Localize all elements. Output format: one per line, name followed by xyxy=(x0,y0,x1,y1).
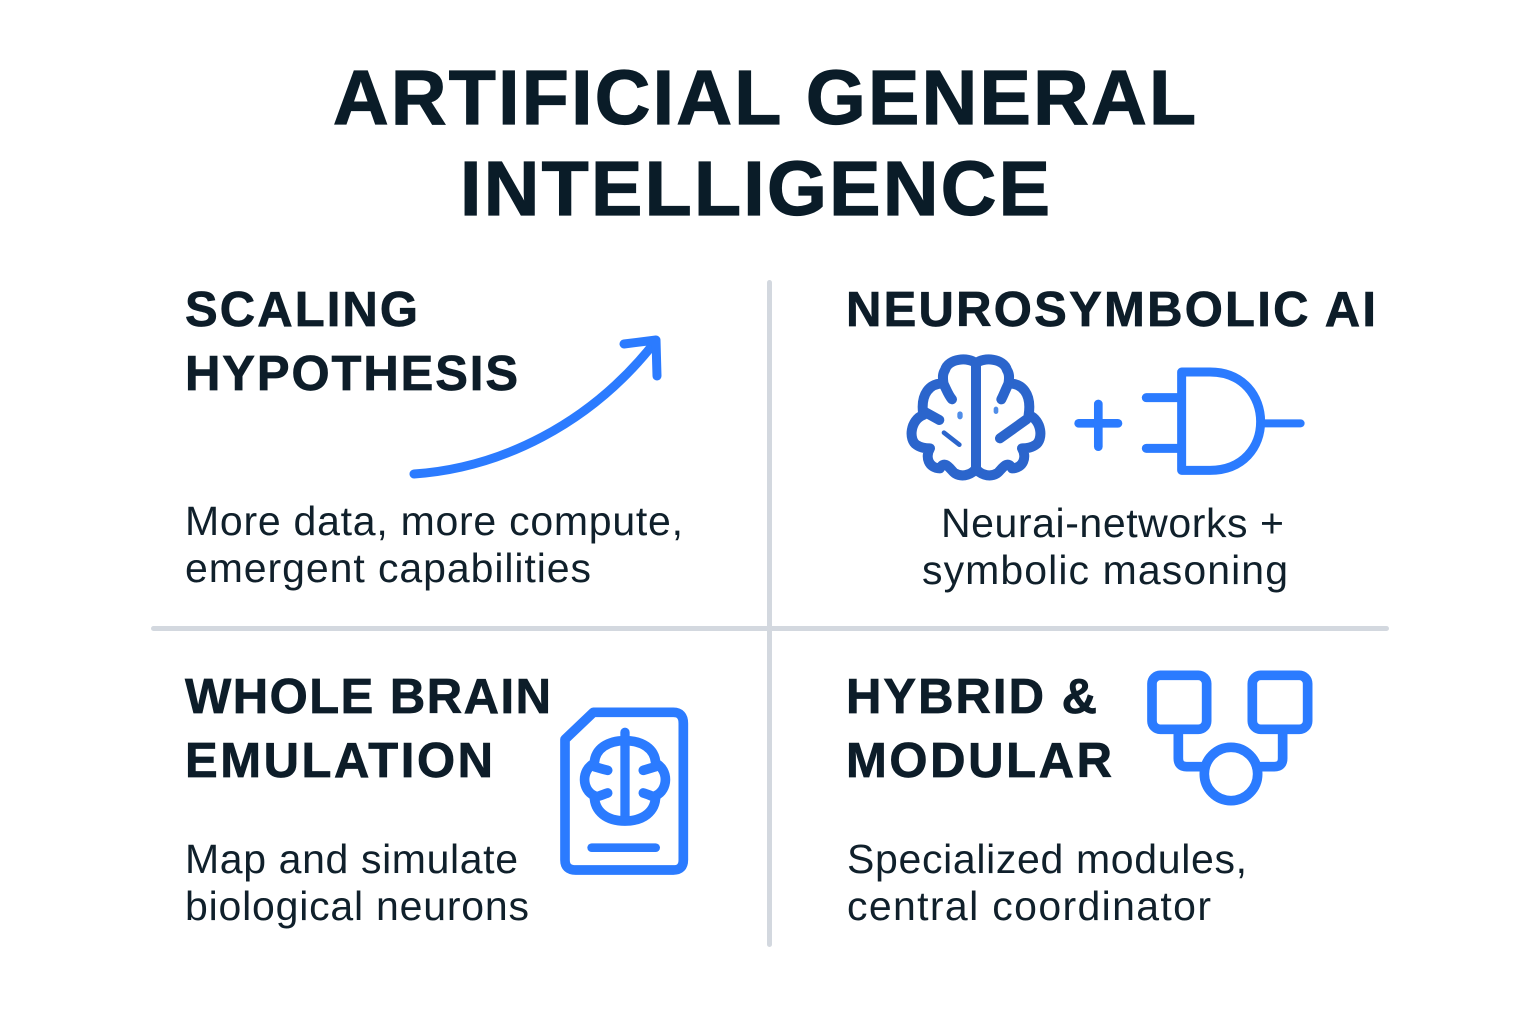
text: scaling description: More data, more compute, xyxy=(185,498,683,544)
title: INTELLIGENCE xyxy=(460,146,1050,232)
heading: neurosymbolic AI: NEUROSYMBOLIC AI xyxy=(846,283,1376,337)
panel: whole brain emulation xyxy=(185,670,683,929)
text: hybrid description: Specialized modules, xyxy=(847,836,1247,882)
heading: hybrid and modular: HYBRID & xyxy=(846,670,1097,724)
panel: neurosymbolic AI xyxy=(846,283,1376,593)
icon: rising arrow xyxy=(414,340,657,474)
heading: scaling hypothesis: HYPOTHESIS xyxy=(185,347,518,401)
heading: whole brain emulation: EMULATION xyxy=(185,734,493,788)
text: whole brain description: biological neurons xyxy=(185,883,529,929)
icon: AND logic gate xyxy=(1146,372,1301,470)
title: ARTIFICIAL GENERAL xyxy=(333,55,1196,141)
text: scaling description xyxy=(185,498,683,591)
text: whole brain description xyxy=(185,836,529,929)
icon: connected modules xyxy=(1152,675,1308,801)
text: neurosymbolic description: symbolic masoning xyxy=(922,547,1288,593)
icon: brain on document card xyxy=(565,712,683,870)
heading: scaling hypothesis xyxy=(185,283,518,401)
heading: hybrid and modular xyxy=(846,670,1112,788)
text: scaling description: emergent capabilities xyxy=(185,545,591,591)
text: neurosymbolic description: Neurai-networks + xyxy=(941,500,1284,546)
panel: hybrid and modular xyxy=(846,670,1308,929)
icon: plus xyxy=(1079,404,1118,447)
heading: scaling hypothesis: SCALING xyxy=(185,283,418,337)
heading: whole brain emulation: WHOLE BRAIN xyxy=(185,670,551,724)
text: hybrid description xyxy=(847,836,1247,929)
text: hybrid description: central coordinator xyxy=(847,883,1211,929)
panel: scaling hypothesis xyxy=(185,283,683,591)
text: neurosymbolic description xyxy=(922,500,1288,593)
heading: whole brain emulation xyxy=(185,670,551,788)
text: whole brain description: Map and simulate xyxy=(185,836,518,882)
icon: brain xyxy=(912,359,1040,475)
title xyxy=(333,55,1196,232)
heading: hybrid and modular: MODULAR xyxy=(846,734,1112,788)
